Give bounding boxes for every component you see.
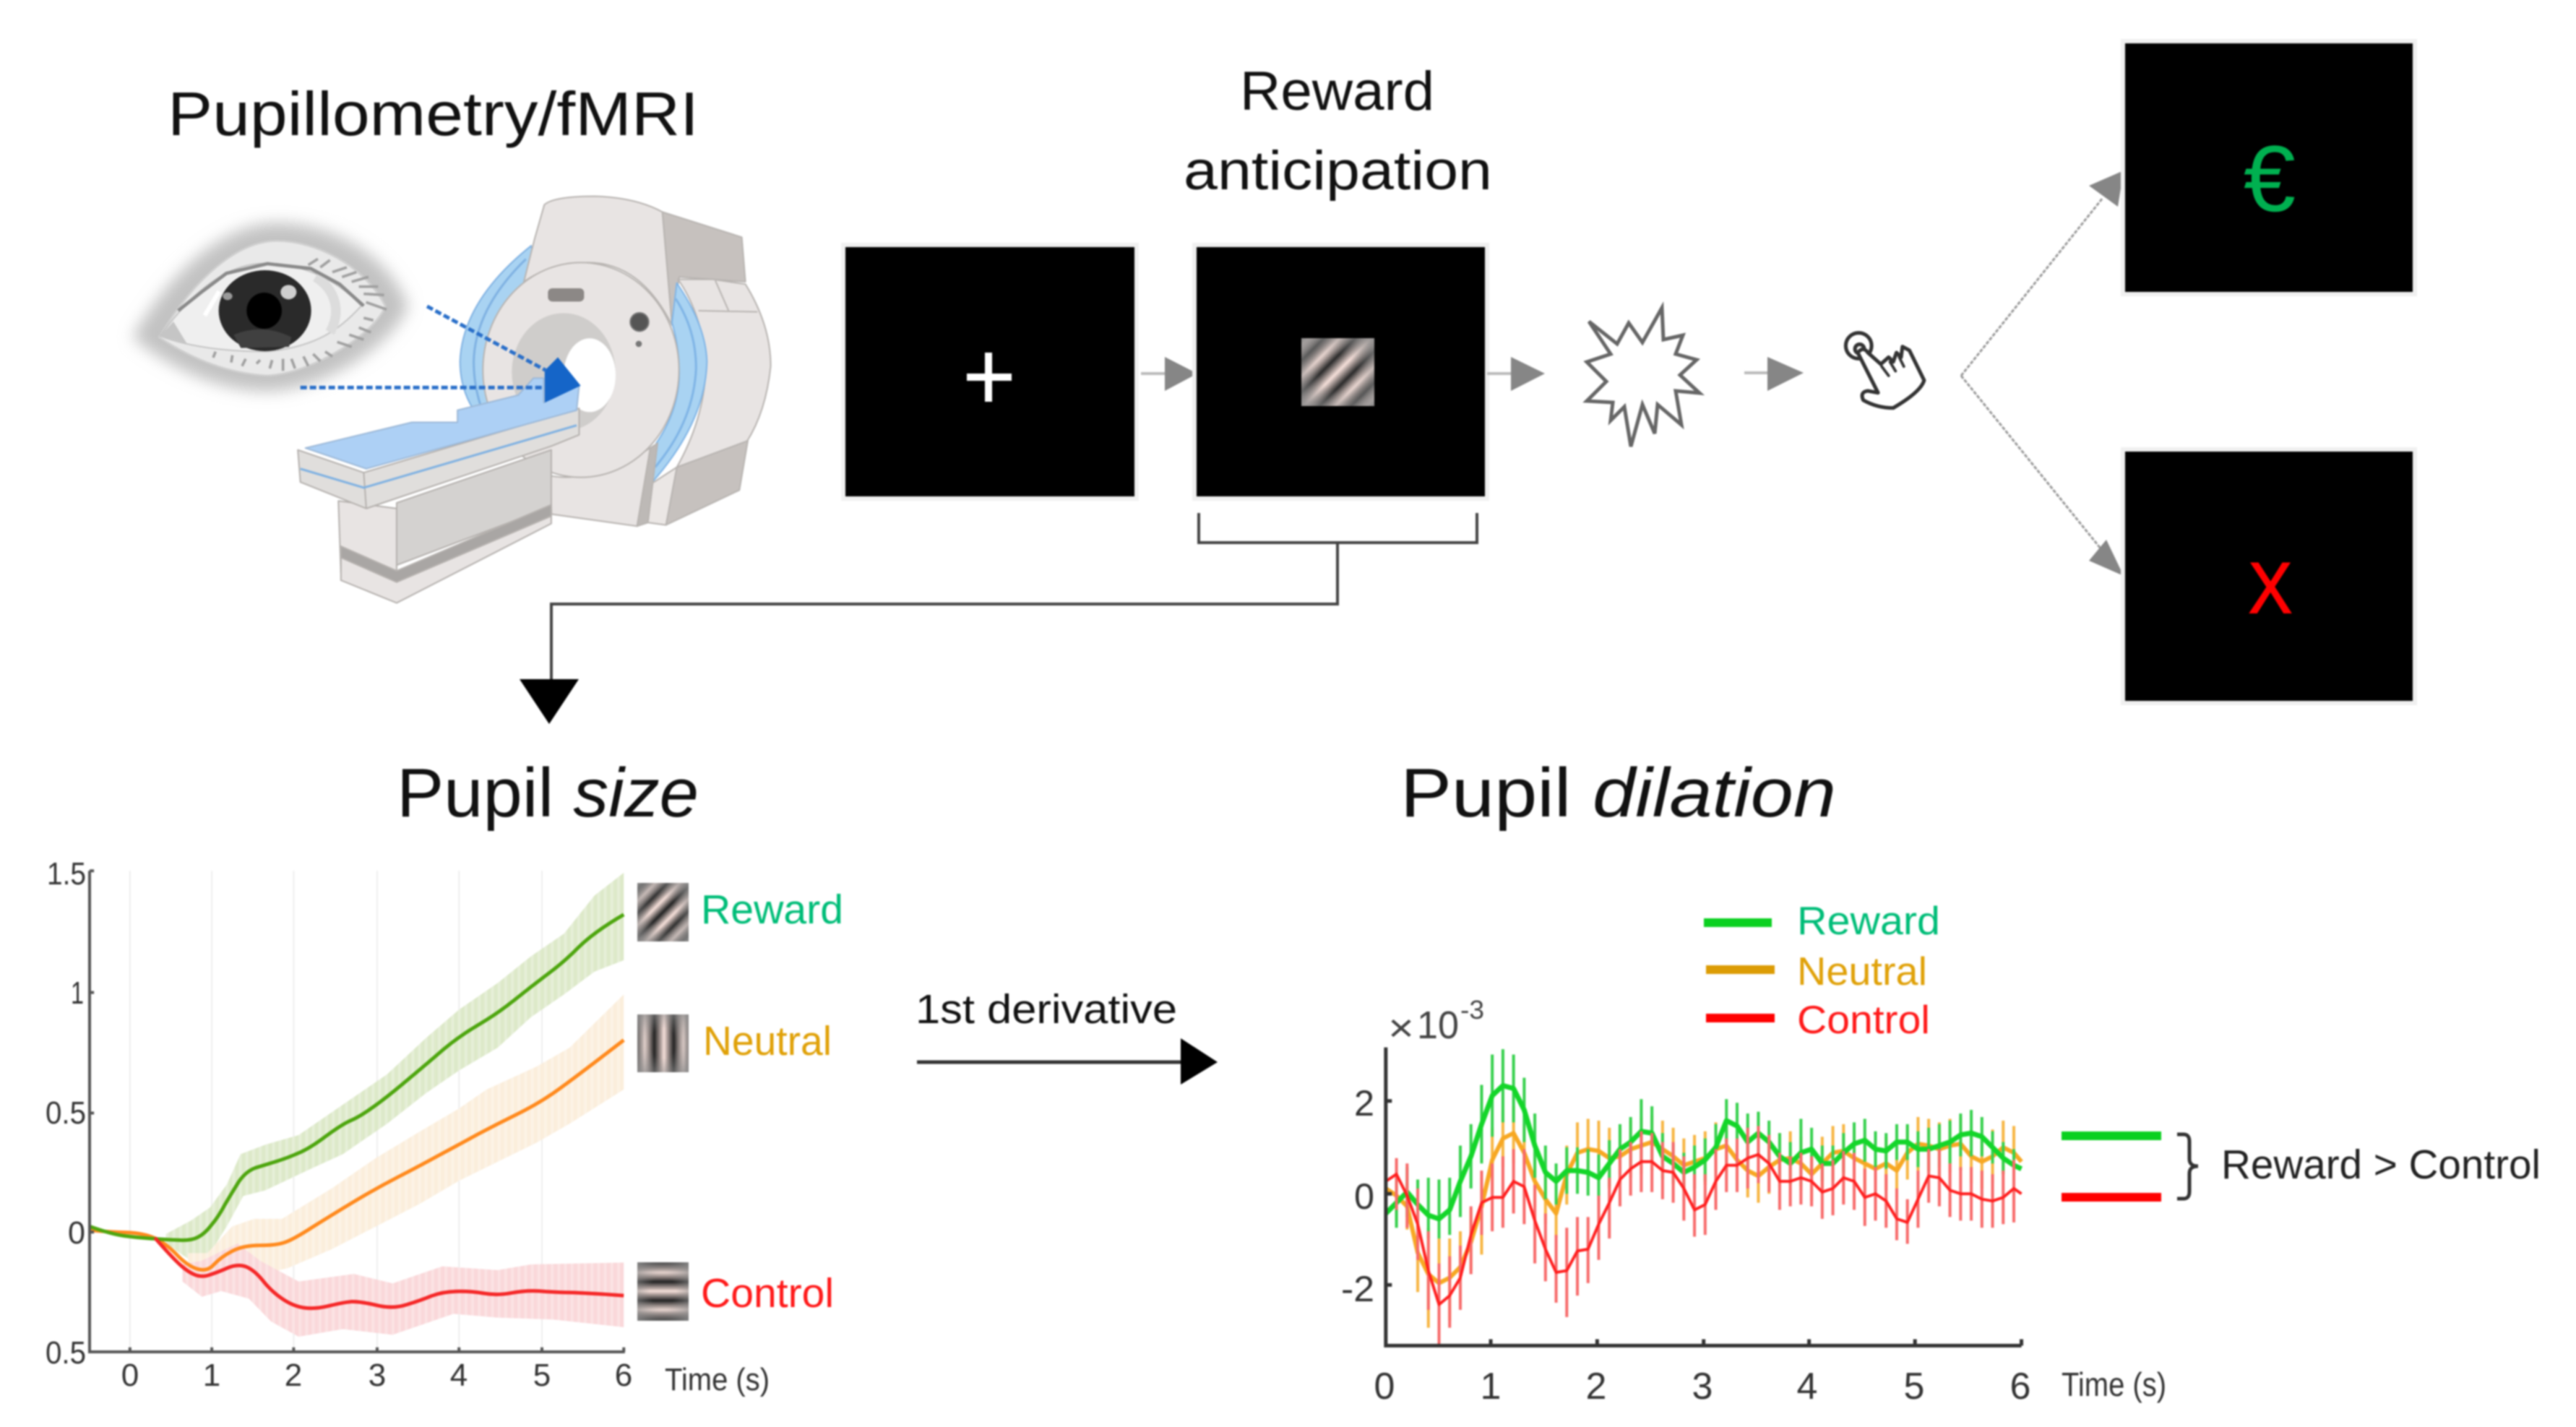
x axis labels: 0 bbox=[121, 1358, 139, 1393]
x axis labels: 3 bbox=[1692, 1366, 1713, 1407]
y axis labels: 2 bbox=[1354, 1083, 1374, 1124]
panel: win outcome screen: € bbox=[2244, 126, 2296, 231]
x axis labels bbox=[121, 1358, 632, 1393]
x axis labels: 1 bbox=[203, 1358, 220, 1393]
heading: Pupil dilation: Pupil dilation bbox=[1400, 754, 1836, 832]
legend: reward, neutral, control: Reward bbox=[1797, 898, 1940, 943]
icon: starburst target bbox=[1587, 308, 1700, 447]
x axis title: Time (s) bbox=[665, 1362, 770, 1397]
icon: MRI scanner bbox=[298, 197, 771, 603]
x axis labels: 4 bbox=[450, 1358, 468, 1393]
heading: Pupil size: Pupil size bbox=[397, 754, 699, 832]
arrow: 1st derivative bbox=[916, 986, 1218, 1085]
panel: no-win outcome screen: X bbox=[2249, 548, 2292, 628]
y axis labels: 1 bbox=[71, 975, 84, 1011]
panel: reward anticipation cue screen bbox=[1197, 247, 1485, 496]
x axis labels: 5 bbox=[533, 1358, 551, 1393]
x axis labels: 2 bbox=[1586, 1366, 1606, 1407]
heading: Reward anticipation: anticipation bbox=[1184, 140, 1492, 202]
heading: Reward anticipation: Reward bbox=[1240, 61, 1434, 122]
arrow: response to win outcome bbox=[1961, 171, 2124, 376]
icon: eye bbox=[132, 223, 408, 392]
x axis labels: 3 bbox=[369, 1358, 386, 1393]
x axis labels: 2 bbox=[285, 1358, 302, 1393]
heading: Reward anticipation bbox=[1184, 61, 1492, 202]
y axis labels: 0.5 bbox=[46, 1095, 86, 1131]
callout: Reward > Control bbox=[2062, 1131, 2541, 1202]
arrow: 1st derivative: 1st derivative bbox=[916, 986, 1177, 1032]
arrow: target to response bbox=[1744, 357, 1804, 391]
legend: reward, neutral, control: Neutral bbox=[1797, 949, 1927, 993]
legend: reward grating: Reward bbox=[701, 887, 843, 933]
chart plot area: bands and mean curves bbox=[90, 871, 625, 1352]
scale factor label: × bbox=[1388, 1006, 1414, 1050]
chart: pupil dilation over time bbox=[1341, 898, 2166, 1407]
x axis labels: 0 bbox=[1374, 1366, 1395, 1407]
chart plot area: error bars and mean curves bbox=[1386, 1048, 2022, 1345]
legend: neutral grating: Neutral bbox=[703, 1018, 832, 1064]
y axis labels bbox=[46, 856, 86, 1371]
y axis labels: 0 bbox=[68, 1215, 85, 1251]
bracket and connector to pupil size bbox=[520, 513, 1477, 724]
scale factor label: 10 bbox=[1417, 1004, 1459, 1047]
arrow: response to no-win outcome bbox=[1961, 376, 2124, 576]
chart: pupil size over time bbox=[46, 856, 843, 1397]
y axis labels: 0 bbox=[1354, 1176, 1374, 1217]
arrow: cue to target bbox=[1487, 357, 1545, 391]
y axis labels: 0.5 bbox=[46, 1335, 86, 1371]
x axis labels: 5 bbox=[1904, 1366, 1924, 1407]
x axis labels: 4 bbox=[1797, 1366, 1817, 1407]
title: Pupillometry/fMRI: Pupillometry/fMRI bbox=[168, 80, 699, 149]
x axis labels: 6 bbox=[2010, 1366, 2030, 1407]
panel: no-win outcome screen bbox=[2125, 452, 2413, 701]
x axis labels: 1 bbox=[1481, 1366, 1501, 1407]
callout: Reward > Control: Reward > Control bbox=[2221, 1142, 2541, 1188]
y axis labels bbox=[1341, 1083, 1374, 1309]
y axis labels: -2 bbox=[1341, 1269, 1374, 1309]
panel: fixation screen bbox=[845, 247, 1134, 496]
y axis labels: 1.5 bbox=[47, 856, 86, 892]
legend: reward grating bbox=[637, 883, 843, 941]
x axis labels bbox=[1374, 1366, 2030, 1407]
x axis title: Time (s) bbox=[2062, 1366, 2166, 1403]
legend: reward, neutral, control: Control bbox=[1797, 997, 1930, 1042]
scale factor label: -3 bbox=[1460, 995, 1484, 1025]
legend: control grating: Control bbox=[701, 1270, 834, 1316]
x axis labels: 6 bbox=[615, 1358, 632, 1393]
legend: neutral grating bbox=[637, 1014, 832, 1072]
icon: pressing hand bbox=[1845, 333, 1924, 408]
panel: win outcome screen bbox=[2125, 43, 2413, 292]
arrow: fixation to cue bbox=[1141, 357, 1197, 391]
legend: control grating bbox=[637, 1262, 834, 1321]
legend: reward, neutral, control bbox=[1704, 898, 1940, 1042]
scale factor label bbox=[1388, 995, 1484, 1050]
